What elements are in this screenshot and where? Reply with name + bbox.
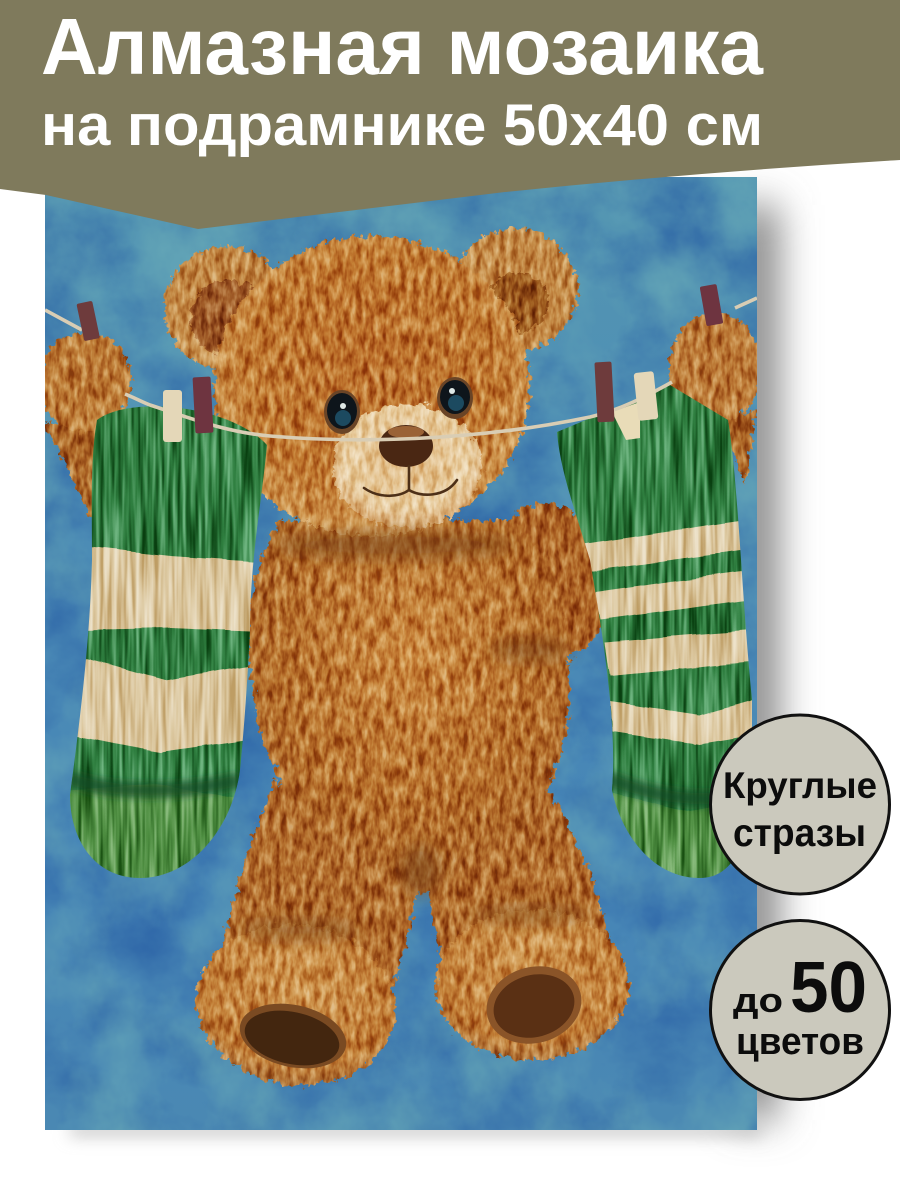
left sock toe (70, 784, 234, 878)
left foot sole (240, 1004, 346, 1068)
right leg (428, 790, 611, 958)
panel: diamond mosaic canvas artwork (39, 177, 761, 1130)
subtitle: на подрамнике 50х40 см (41, 93, 763, 158)
clothespin: left edge (76, 301, 100, 341)
left foot (194, 922, 397, 1090)
left leg (215, 780, 418, 1010)
clothespins (76, 284, 723, 442)
left eye (324, 390, 360, 434)
right foot sole (486, 966, 582, 1044)
top banner (0, 0, 900, 229)
left sock (70, 406, 267, 878)
right sock (550, 380, 760, 885)
right foot (435, 910, 629, 1060)
head (214, 236, 530, 536)
right sock green body (557, 385, 752, 811)
badge: round rhinestones: стразы (733, 812, 866, 855)
title: Алмазная мозаика (41, 2, 763, 91)
badge: up to 50 colours: цветов (736, 1021, 864, 1063)
leg and arm shading (240, 638, 590, 940)
clothesline rope (45, 298, 757, 440)
clothespin: left maroon (193, 377, 213, 433)
right arm and paw (512, 313, 757, 658)
bear fur shapes (39, 228, 761, 1098)
badge: up to 50 colours: до (733, 982, 783, 1020)
badge: up to 50 colours (710, 920, 890, 1100)
artwork blue background (45, 177, 757, 1130)
clothespin: right cream (634, 371, 658, 421)
clothespin: right maroon (594, 362, 615, 422)
neck shadow (275, 531, 515, 559)
left sock green body (70, 406, 267, 798)
right eye (437, 377, 473, 419)
left ear (164, 246, 288, 370)
nose (379, 425, 433, 467)
right ear (453, 228, 577, 352)
sock cuff tear (612, 402, 640, 440)
clothespin: left cream (163, 390, 182, 442)
badge: up to 50 colours: 50 (790, 948, 867, 1028)
badge: round rhinestones: Круглые (723, 765, 877, 806)
smile (364, 466, 457, 496)
torso (249, 520, 570, 895)
right sock toe (612, 792, 730, 878)
clothespin: right edge (700, 284, 723, 326)
right sock cream stripes (580, 520, 760, 745)
muzzle (332, 404, 482, 528)
teddy bear (39, 228, 761, 1098)
canvas drop shadow (70, 205, 777, 1136)
badge: round rhinestones (710, 715, 890, 894)
left arm and paw (39, 332, 131, 545)
left sock cream stripes (70, 546, 260, 752)
